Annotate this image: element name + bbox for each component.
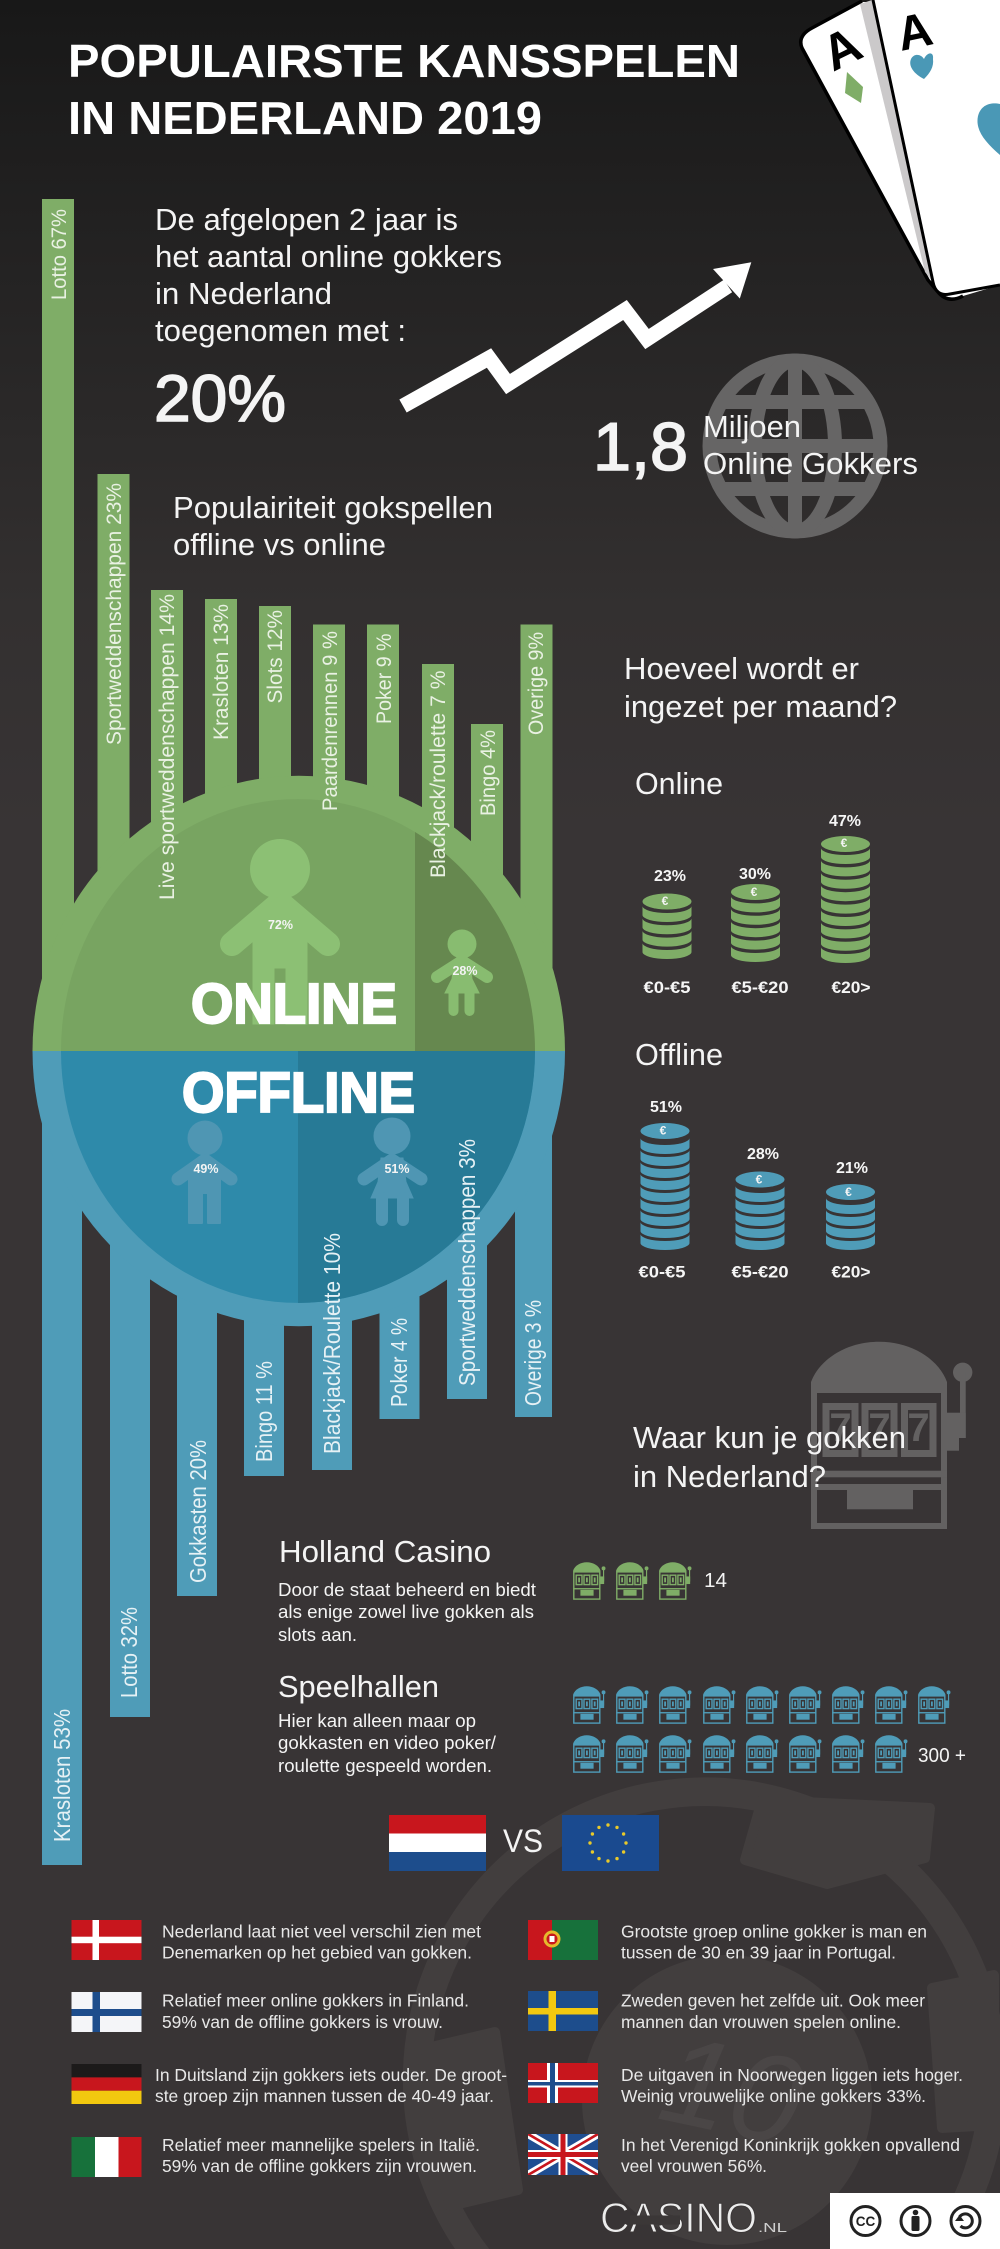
flag: Italy bbox=[72, 2137, 142, 2177]
chart: offline bars bbox=[42, 1051, 552, 1865]
text: United Kingdom: veel vrouwen 56%. bbox=[621, 2156, 767, 2176]
icons: Holland Casino slot machines bbox=[573, 1562, 691, 1599]
stat: 1,8 miljoen online gokkers: Online Gokkers bbox=[703, 447, 918, 481]
labels: online bars: Blackjack/roulette 7 % bbox=[427, 670, 450, 878]
chart: offline coin stack 5-20 bbox=[736, 1172, 784, 1250]
heading: monthly stakes: ingezet per maand? bbox=[624, 690, 897, 724]
labels: online ranges: €5-€20 bbox=[732, 978, 788, 997]
labels: gender percentages: 49% bbox=[193, 1162, 219, 1176]
text block: Speelhallen: roulette gespeeld worden. bbox=[278, 1756, 492, 1776]
panel: offline half circle bbox=[32, 1051, 565, 1326]
chart: online coin stack 20+ bbox=[821, 836, 870, 963]
text: online growth intro bbox=[155, 203, 502, 348]
labels: offline percentages: 28% bbox=[747, 1146, 779, 1163]
text block: Speelhallen bbox=[278, 1669, 496, 1776]
count: 14: 14 bbox=[704, 1570, 727, 1592]
labels: online bars: Poker 9 % bbox=[373, 634, 396, 724]
flag: European Union bbox=[562, 1815, 659, 1871]
labels: offline bars: Lotto 32% bbox=[116, 1607, 142, 1698]
labels: offline ranges: €20> bbox=[832, 1262, 871, 1282]
labels: offline ranges: €5-€20 bbox=[732, 1262, 788, 1282]
chart: online coin stack 20+: € bbox=[841, 836, 848, 850]
text: Sweden bbox=[621, 1991, 925, 2032]
text: Germany: In Duitsland zijn gokkers iets ouder. De groot- bbox=[155, 2065, 507, 2085]
labels: online ranges: €0-€5 bbox=[644, 978, 690, 997]
labels: offline bars: Sportweddenschappen 3% bbox=[454, 1139, 480, 1386]
text: Finland bbox=[162, 1991, 469, 2032]
text: Portugal: tussen de 30 en 39 jaar in Portugal. bbox=[621, 1943, 896, 1963]
stat: 1,8 miljoen online gokkers: Miljoen bbox=[703, 410, 801, 444]
icon: big slot machine: 7 bbox=[868, 1406, 891, 1450]
chart: offline coin stack 20+ bbox=[826, 1184, 875, 1250]
labels: offline percentages: 51% bbox=[650, 1099, 682, 1116]
heading: where to gamble: Waar kun je gokken bbox=[633, 1421, 906, 1455]
text block: Holland Casino: Door de staat beheerd en biedt bbox=[278, 1580, 536, 1600]
icon: globe bbox=[710, 360, 880, 532]
text block: Holland Casino: Holland Casino bbox=[279, 1534, 491, 1569]
arrow: rising trend bbox=[403, 262, 751, 406]
icon: cc bbox=[851, 2206, 880, 2236]
front card outline bbox=[873, 0, 1000, 294]
icon: cc: CC bbox=[856, 2214, 875, 2229]
icon: offline male figure bbox=[178, 1120, 231, 1223]
heading: monthly stakes: Hoeveel wordt er bbox=[624, 652, 859, 686]
back card bbox=[801, 2, 1000, 299]
chart: online coin stack 5-20: € bbox=[751, 885, 758, 899]
flag: Portugal bbox=[528, 1920, 598, 1960]
heading: popularity: offline vs online bbox=[173, 528, 386, 562]
text: Portugal bbox=[621, 1922, 927, 1963]
labels: online bars: Lotto 67% bbox=[48, 209, 71, 300]
labels: offline ranges bbox=[638, 1262, 871, 1282]
flag: Denmark bbox=[72, 1920, 142, 1960]
text: Germany bbox=[155, 2065, 507, 2106]
icon: playing cards bbox=[801, 0, 1000, 299]
labels: online bars: Overige 9% bbox=[525, 632, 548, 735]
text: Italy: 59% van de offline gokkers zijn vrouwen. bbox=[162, 2156, 477, 2176]
heading: offline: OFFLINE bbox=[182, 1061, 415, 1125]
heading: online: ONLINE bbox=[191, 972, 397, 1036]
text: Norway: De uitgaven in Noorwegen liggen iets hoger. bbox=[621, 2065, 963, 2085]
title bbox=[68, 35, 740, 144]
heading: popularity bbox=[173, 491, 493, 562]
labels: gender percentages: 72% bbox=[268, 918, 293, 932]
ace of hearts letter: A bbox=[892, 3, 937, 62]
text block: Speelhallen: Hier kan alleen maar op bbox=[278, 1711, 476, 1731]
panel: online half circle bbox=[32, 776, 565, 1051]
labels: online bars: Bingo 4% bbox=[477, 730, 500, 816]
icon: big slot machine: 7 bbox=[907, 1406, 930, 1450]
labels: offline percentages bbox=[650, 1099, 868, 1177]
front card bbox=[873, 0, 1000, 294]
text: Norway: Weinig vrouwelijke online gokkers 33%. bbox=[621, 2086, 926, 2106]
logo: casino.nl: CASINO bbox=[600, 2194, 757, 2241]
text: Denmark: Denemarken op het gebied van gokken. bbox=[162, 1943, 472, 1963]
text: online growth intro: toegenomen met : bbox=[155, 314, 406, 348]
text: United Kingdom bbox=[621, 2135, 960, 2176]
heading: where to gamble: in Nederland? bbox=[633, 1460, 826, 1494]
flag: Sweden bbox=[528, 1991, 598, 2031]
flag: Finland bbox=[72, 1992, 142, 2032]
text: VS: VS bbox=[503, 1823, 543, 1859]
labels: offline bars: Blackjack/Roulette 10% bbox=[319, 1233, 345, 1454]
flag: Norway bbox=[528, 2063, 598, 2103]
heading: monthly stakes bbox=[624, 652, 897, 724]
text block: Speelhallen: Speelhallen bbox=[278, 1669, 439, 1704]
icon: attribution bbox=[901, 2206, 930, 2236]
watermark: poker chip bbox=[403, 1777, 1000, 2249]
labels: gender percentages: 51% bbox=[384, 1162, 410, 1176]
chart: online bars bbox=[42, 199, 552, 1051]
text block: Holland Casino bbox=[278, 1534, 536, 1645]
text: Norway bbox=[621, 2065, 963, 2106]
stat: 1,8 miljoen online gokkers bbox=[593, 409, 918, 485]
title: IN NEDERLAND 2019 bbox=[68, 92, 542, 144]
text: Italy: Relatief meer mannelijke spelers in Italië. bbox=[162, 2135, 480, 2155]
icon: share alike bbox=[951, 2206, 980, 2236]
text block: Holland Casino: slots aan. bbox=[278, 1625, 357, 1645]
text: Denmark: Nederland laat niet veel verschil zien met bbox=[162, 1922, 481, 1942]
icon: online male figure bbox=[232, 839, 328, 1024]
text: Finland: Relatief meer online gokkers in Finland. bbox=[162, 1991, 469, 2011]
text: online growth intro: het aantal online gokkers bbox=[155, 240, 502, 274]
heading: offline stakes: Offline bbox=[635, 1038, 723, 1072]
chart: online coin stack 5-20 bbox=[731, 884, 780, 962]
icon: offline female figure bbox=[364, 1118, 421, 1220]
labels: online bars: Live sportweddenschappen 14% bbox=[156, 594, 179, 900]
text: Denmark bbox=[162, 1922, 481, 1963]
labels: gender percentages: 28% bbox=[452, 964, 478, 978]
icon: online female figure bbox=[437, 930, 487, 1011]
labels: online percentages: 47% bbox=[829, 813, 861, 830]
stat: 20%: 20% bbox=[154, 361, 286, 435]
back card outline bbox=[801, 1, 963, 299]
chart: offline coin stack 5-20: € bbox=[756, 1172, 763, 1186]
labels: gender percentages bbox=[193, 918, 478, 1176]
labels: online percentages: 30% bbox=[739, 866, 771, 883]
chart: offline coin stack 0-5 bbox=[640, 1123, 690, 1250]
text: online growth intro: De afgelopen 2 jaar is bbox=[155, 203, 458, 237]
heading: popularity: Populairiteit gokspellen bbox=[173, 491, 493, 525]
ace of diamonds letter: A bbox=[813, 16, 870, 82]
labels: online bars bbox=[48, 209, 548, 900]
text: United Kingdom: In het Verenigd Koninkrijk gokken opvallend bbox=[621, 2135, 960, 2155]
text block: Holland Casino: als enige zowel live gokken als bbox=[278, 1602, 534, 1622]
title: POPULAIRSTE KANSSPELEN bbox=[68, 35, 740, 87]
labels: offline bars bbox=[49, 1139, 546, 1842]
labels: offline ranges: €0-€5 bbox=[638, 1262, 686, 1282]
labels: online ranges: €20> bbox=[832, 978, 871, 997]
labels: online percentages: 23% bbox=[654, 868, 686, 885]
text: Sweden: mannen dan vrouwen spelen online. bbox=[621, 2012, 901, 2032]
labels: online bars: Paardenrennen 9 % bbox=[319, 631, 342, 811]
icon: big slot machine bbox=[811, 1342, 972, 1526]
icon: diamond bbox=[845, 72, 863, 103]
labels: online bars: Slots 12% bbox=[264, 610, 287, 704]
icon: heart bbox=[910, 53, 933, 79]
labels: offline percentages: 21% bbox=[836, 1160, 868, 1177]
heading: online stakes: Online bbox=[635, 767, 723, 801]
card shadow band bbox=[860, 0, 933, 282]
text: Portugal: Grootste groep online gokker is man en bbox=[621, 1922, 927, 1942]
text block: Speelhallen: gokkasten en video poker/ bbox=[278, 1733, 496, 1753]
labels: online bars: Krasloten 13% bbox=[210, 604, 233, 740]
chart: online coin stack 0-5 bbox=[642, 894, 692, 959]
logo: casino.nl: .NL bbox=[758, 2220, 787, 2235]
text: Finland: 59% van de offline gokkers is vrouw. bbox=[162, 2012, 443, 2032]
chart: online coin stack 0-5: € bbox=[662, 894, 669, 908]
flag: Netherlands bbox=[389, 1815, 486, 1871]
flag: United Kingdom bbox=[528, 2134, 598, 2175]
labels: offline bars: Poker 4 % bbox=[386, 1318, 412, 1407]
watermark: poker chip: 10 bbox=[649, 2008, 814, 2173]
text: Italy bbox=[162, 2135, 480, 2176]
icon: big slot machine: 7 bbox=[829, 1406, 852, 1450]
count: 300 +: 300 + bbox=[918, 1745, 966, 1767]
flag: Germany bbox=[72, 2064, 142, 2104]
labels: online ranges bbox=[644, 978, 871, 997]
labels: offline bars: Krasloten 53% bbox=[49, 1709, 75, 1842]
text: Sweden: Zweden geven het zelfde uit. Ook meer bbox=[621, 1991, 925, 2011]
text: online growth intro: in Nederland bbox=[155, 277, 332, 311]
badge: creative commons licence bbox=[830, 2193, 1000, 2249]
chart: offline coin stack 20+: € bbox=[845, 1185, 852, 1199]
labels: online percentages bbox=[654, 813, 861, 885]
chart: offline coin stack 0-5: € bbox=[660, 1124, 667, 1138]
labels: offline bars: Gokkasten 20% bbox=[185, 1440, 211, 1583]
stat: 1,8 miljoen online gokkers: 1,8 bbox=[593, 409, 688, 485]
icons: Speelhallen slot machines bbox=[573, 1686, 950, 1772]
heading: where to gamble bbox=[633, 1421, 906, 1494]
text: Germany: ste groep zijn mannen tussen de 40-49 jaar. bbox=[155, 2086, 494, 2106]
labels: offline bars: Overige 3 % bbox=[520, 1300, 546, 1406]
labels: offline bars: Bingo 11 % bbox=[251, 1361, 277, 1462]
labels: online bars: Sportweddenschappen 23% bbox=[103, 483, 126, 745]
icon: big heart bbox=[977, 103, 1000, 155]
